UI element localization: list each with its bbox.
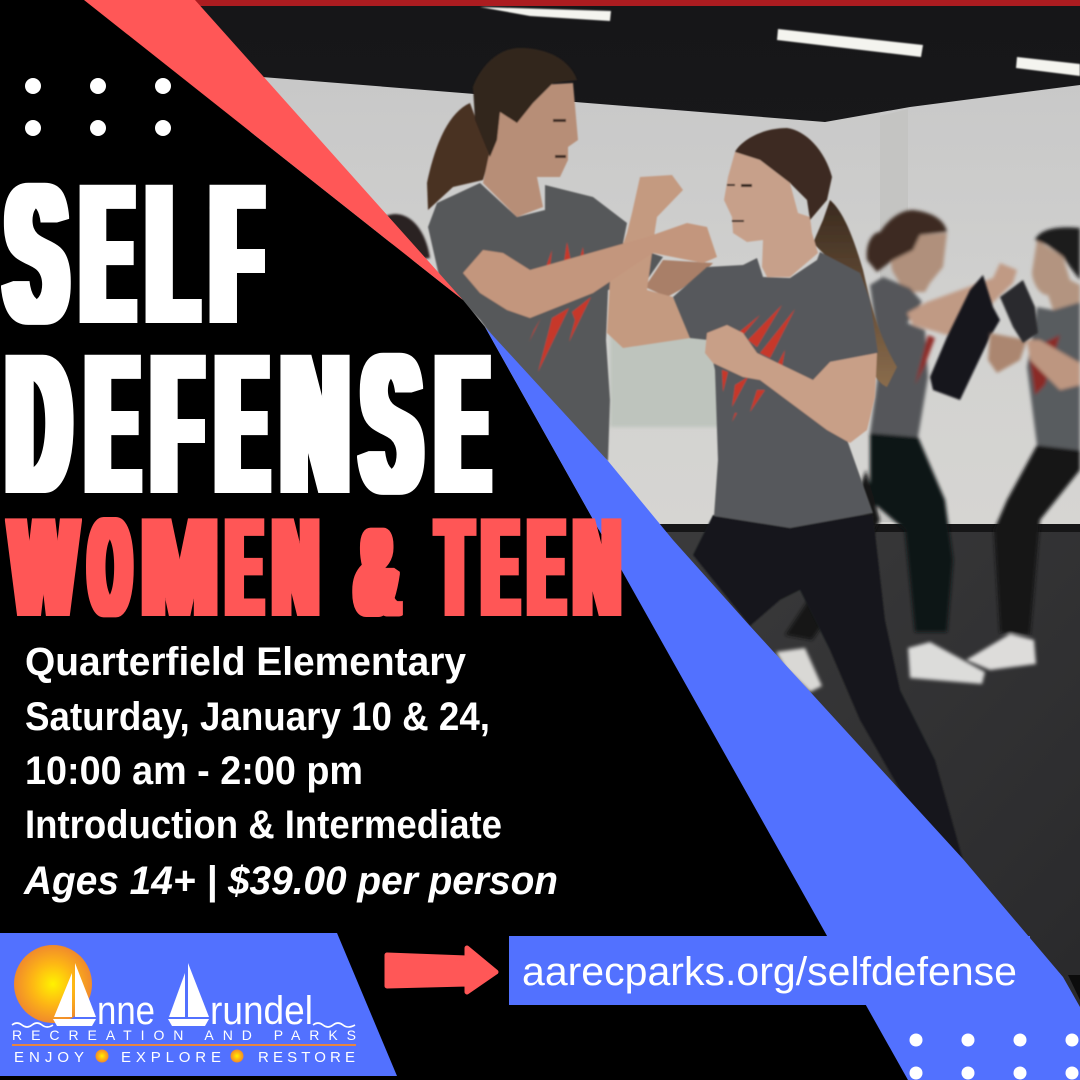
- hair: [1035, 227, 1080, 280]
- instructor claw logo: [529, 242, 591, 372]
- logo sailboats: [53, 963, 209, 1026]
- logo name: rundel: [210, 989, 313, 1033]
- shirt: [1027, 302, 1080, 450]
- title: self defense: E: [83, 143, 132, 364]
- logo motto: [14, 1049, 355, 1066]
- raised arm: [607, 175, 697, 348]
- instructor second arm: [645, 260, 713, 297]
- title: self defense: E: [88, 313, 137, 534]
- text: E: [438, 313, 487, 534]
- title: self defense: E: [218, 313, 266, 534]
- event details: 10:00 am - 2:00 pm: [25, 749, 363, 793]
- black corner sliver: [1068, 975, 1080, 1000]
- logo motto dots: [96, 1050, 244, 1062]
- girl face and neck: [724, 152, 818, 277]
- title: self defense: S: [6, 143, 66, 364]
- claw: [1030, 335, 1060, 395]
- title: self defense: F: [212, 143, 261, 364]
- event details: Saturday, January 10 & 24,: [25, 695, 490, 739]
- subtitle: women and teen: E: [227, 490, 261, 645]
- subtitle: women and teen: W: [11, 490, 76, 645]
- logo motto: EXPLORE: [121, 1049, 221, 1066]
- front arm: [1027, 340, 1080, 390]
- url box: aarecparks.org/selfdefense: [522, 950, 1017, 994]
- text: N: [574, 490, 620, 645]
- subtitle: women and teen: M: [142, 490, 218, 645]
- title: self defense: F: [153, 313, 201, 534]
- instructor face and neck: [483, 83, 578, 217]
- logo motto: ENJOY: [14, 1049, 84, 1066]
- shirt: [870, 277, 928, 437]
- title: self defense: L: [148, 143, 196, 364]
- logo motto: RESTORE: [258, 1049, 355, 1066]
- girl claw logo: [722, 305, 795, 422]
- subtitle: women and teen: O: [90, 490, 130, 645]
- subtitle: women and teen: T: [438, 490, 471, 645]
- ceiling lights: [480, 7, 1080, 76]
- instructor: [427, 48, 717, 461]
- girl hair: [735, 128, 832, 220]
- dots: top left: [25, 78, 171, 136]
- boxing gloves: [1000, 280, 1038, 343]
- dots: bottom right: [910, 1034, 1078, 1080]
- girl shirt: [673, 252, 878, 528]
- background woman with gloves: [966, 227, 1080, 670]
- girl leggings: [693, 515, 963, 860]
- blue diagonal band: [485, 327, 1080, 1080]
- girl facial features: [727, 184, 752, 222]
- legs: [870, 433, 953, 632]
- arm: [907, 263, 1017, 335]
- instructor punching arm: [463, 223, 717, 318]
- gym floor: [600, 532, 1080, 1080]
- url box: [509, 936, 1030, 1005]
- logo name: [97, 989, 313, 1033]
- girl student: [673, 128, 963, 860]
- instructor shirt: [428, 183, 663, 461]
- gym wall: [250, 76, 1080, 530]
- logo waves: [12, 1023, 355, 1027]
- subtitle: women and teen: E: [483, 490, 517, 645]
- logo sun: [14, 945, 92, 1023]
- title: self defense: [6, 143, 487, 534]
- subtitle: women and teen: N: [274, 490, 318, 645]
- event details: [23, 640, 558, 903]
- claw: [915, 335, 935, 385]
- girl ponytail: [813, 200, 897, 387]
- arrow: [387, 948, 496, 992]
- back arm: [988, 333, 1027, 373]
- legs: [994, 445, 1080, 635]
- instructor ponytail: [427, 103, 490, 210]
- title: self defense: S: [362, 313, 420, 534]
- red strip at top: [190, 0, 1080, 6]
- title: self defense: D: [8, 313, 69, 534]
- subtitle: women and teen: E: [529, 490, 563, 645]
- instructor facial features: [553, 119, 566, 158]
- head: [891, 233, 947, 292]
- logo panel: [0, 933, 397, 1076]
- logo tagline: RECREATION AND PARKS: [12, 1027, 356, 1043]
- person hidden behind instructor: [386, 214, 430, 262]
- subtitle: women and teen: &: [356, 504, 399, 642]
- neck and face: [1032, 240, 1080, 310]
- event details: Introduction & Intermediate: [25, 803, 502, 847]
- hair: [867, 210, 947, 272]
- background woman with pad: [776, 210, 1017, 692]
- event details: Ages 14+ | $39.00 per person: [23, 859, 558, 903]
- instructor hair: [473, 48, 577, 157]
- logo name: nne: [97, 989, 155, 1033]
- girl arm and fist: [705, 325, 877, 443]
- punching pad: [930, 275, 1000, 400]
- title: self defense: N: [282, 313, 348, 534]
- red diagonal triangle: [84, 0, 463, 300]
- event details: Quarterfield Elementary: [25, 640, 467, 684]
